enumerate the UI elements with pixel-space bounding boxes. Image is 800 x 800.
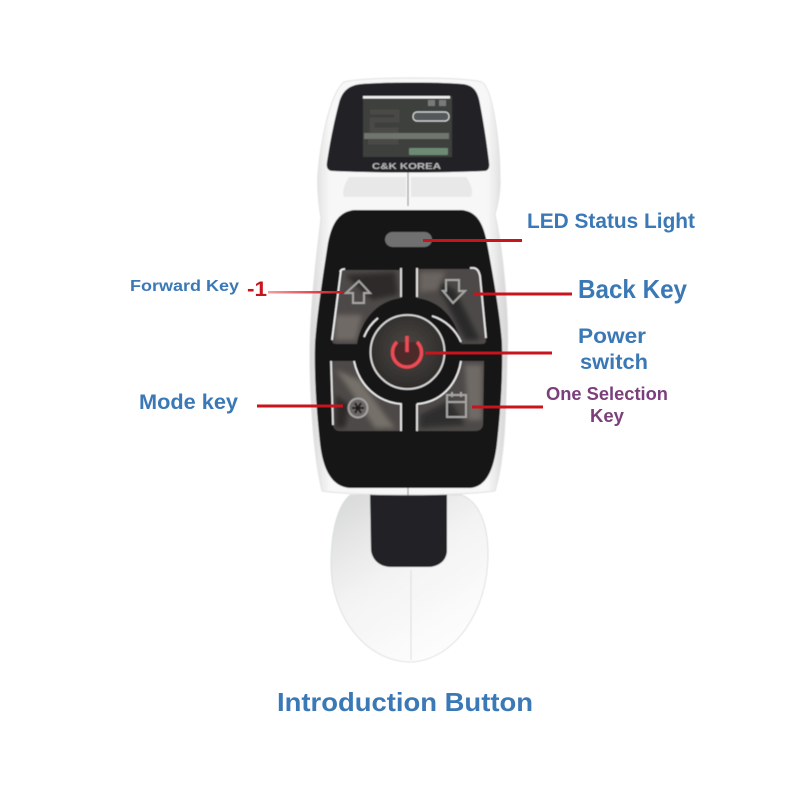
brand label: C&K KOREA (372, 161, 441, 171)
callout: power switch: switch (580, 351, 648, 374)
icon: gear (348, 398, 368, 418)
body seam (407, 172, 409, 495)
icon: calendar (447, 392, 466, 417)
mode key button (331, 361, 401, 431)
callout: back key: Back Key (578, 274, 688, 304)
callout: forward key: -1 (247, 278, 267, 301)
body detail: shoulder shading (343, 177, 472, 197)
callout: power switch: Power (578, 325, 646, 348)
control panel: black face (315, 210, 502, 488)
callout: one selection key: Key (590, 406, 624, 426)
LED status light (385, 232, 432, 247)
callout: one selection key: One Selection (546, 384, 668, 404)
callout: power switch (425, 325, 648, 374)
body: white housing (310, 78, 508, 495)
head: white applicator bulb (331, 495, 488, 662)
callout: forward key: Forward Key (130, 278, 239, 295)
back key button (417, 268, 486, 344)
callout: LED status light: LED Status Light (527, 210, 695, 233)
icon: down arrow (443, 280, 465, 303)
one selection key button (417, 361, 484, 431)
title: Introduction Button: Introduction Button (277, 687, 533, 717)
icon: up arrow (346, 281, 370, 303)
device: handheld unit (310, 78, 508, 662)
icon: power symbol (392, 336, 422, 367)
display screen (363, 96, 452, 157)
forward key button (332, 268, 401, 344)
display bezel (327, 82, 489, 172)
neck: black connector (370, 490, 447, 567)
callout: one selection key (472, 384, 668, 426)
callout: mode key: Mode key (139, 391, 238, 414)
inner highlight arcs around power ring (364, 316, 461, 342)
power switch button (370, 315, 444, 389)
callout: forward key (130, 278, 344, 301)
